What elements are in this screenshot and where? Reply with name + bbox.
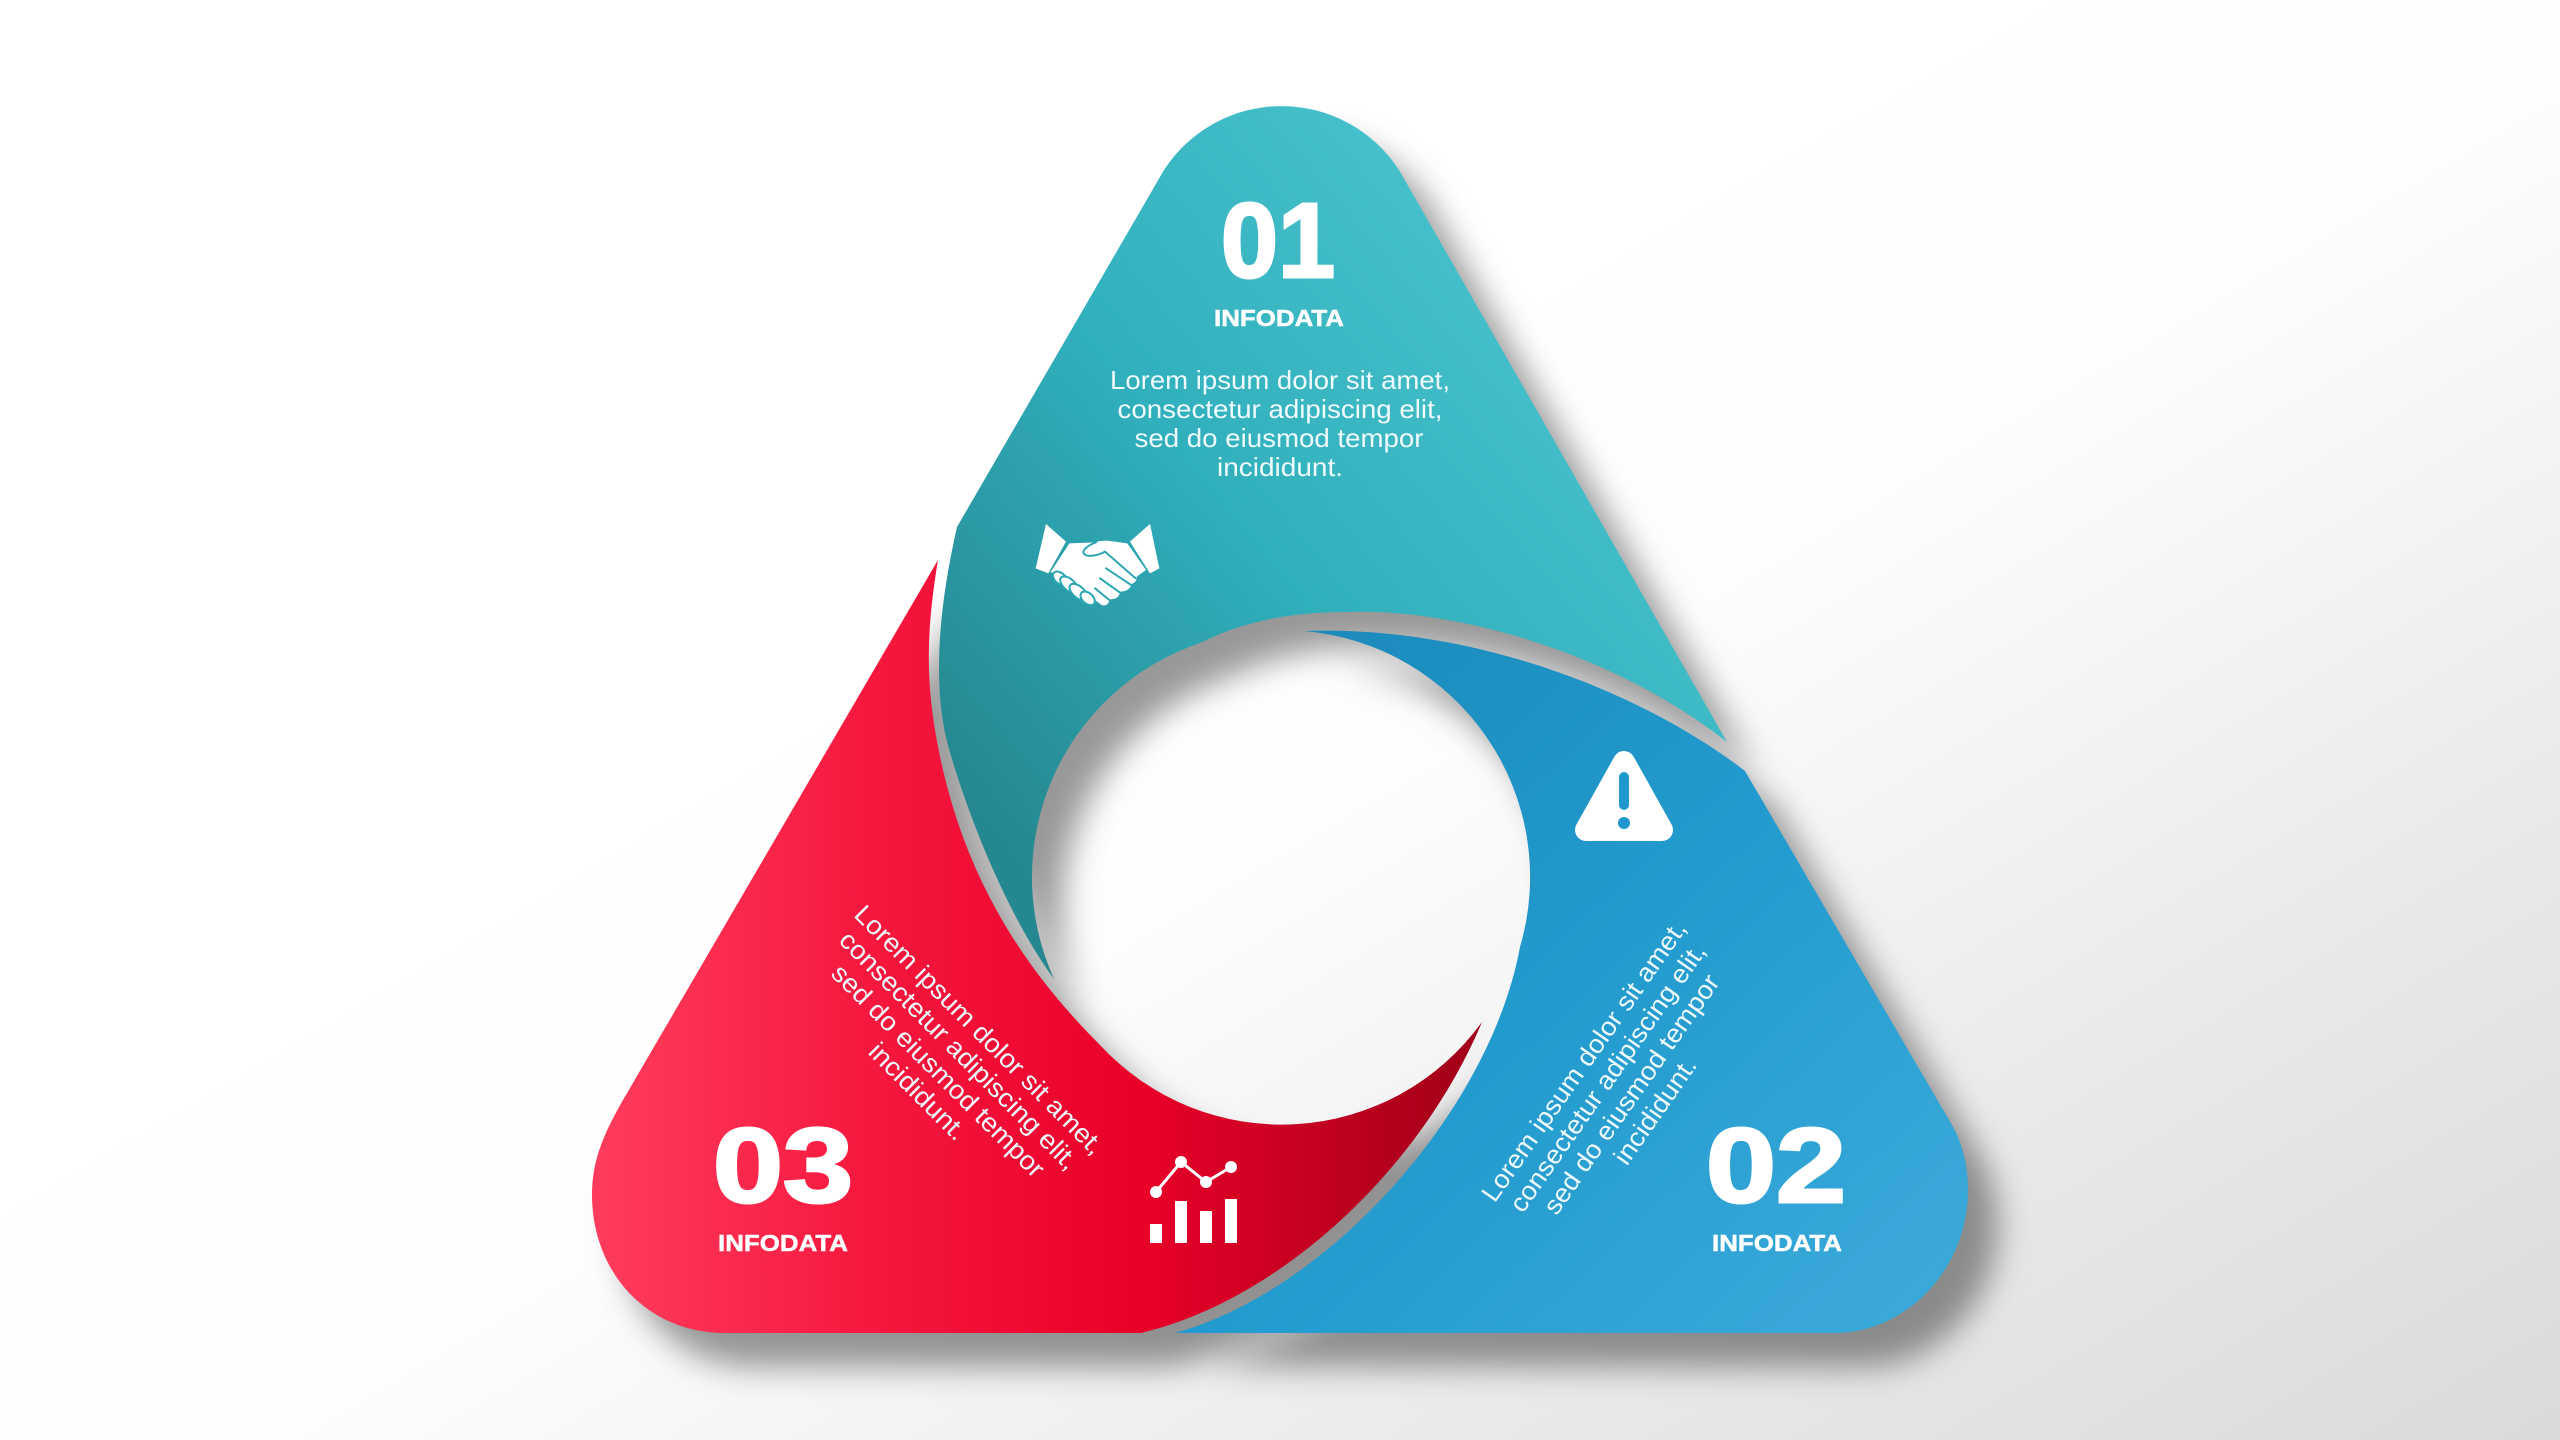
text block 03 bbox=[787, 899, 1110, 1222]
label infodata 01: INFODATA bbox=[1214, 305, 1344, 331]
number 03: 03 bbox=[713, 1107, 853, 1225]
text block 01: Lorem ipsum dolor sit amet, bbox=[1110, 365, 1450, 395]
number 01: 01 bbox=[1221, 182, 1335, 300]
text block 03: consectetur adipiscing elit, bbox=[833, 925, 1084, 1176]
icon: warning triangle bbox=[1586, 762, 1662, 830]
text block 03: incididunt. bbox=[863, 1036, 973, 1146]
label infodata 02: INFODATA bbox=[1712, 1230, 1842, 1256]
panel: segment 03 red bbox=[592, 560, 1482, 1333]
icon: chart with trend line bbox=[1150, 1156, 1237, 1243]
drop shadows of segments bbox=[622, 140, 1998, 1367]
panel: segment 02 blue bbox=[1175, 631, 1968, 1333]
text block 01 bbox=[1110, 365, 1450, 482]
label infodata 03: INFODATA bbox=[718, 1230, 848, 1256]
text block 03: Lorem ipsum dolor sit amet, bbox=[849, 899, 1110, 1160]
text block 02: incididunt. bbox=[1607, 1051, 1703, 1170]
text block 02: sed do eiusmod tempor bbox=[1537, 968, 1726, 1220]
text block 01: incididunt. bbox=[1217, 452, 1343, 482]
text block 01: sed do eiusmod tempor bbox=[1134, 423, 1424, 453]
icon: handshake bbox=[1036, 524, 1159, 608]
panel: segment 01 teal bbox=[939, 106, 1727, 979]
text block 02: Lorem ipsum dolor sit amet, bbox=[1475, 915, 1692, 1207]
text block 02: consectetur adipiscing elit, bbox=[1503, 937, 1712, 1218]
number 02: 02 bbox=[1706, 1107, 1846, 1225]
text block 02 bbox=[1475, 915, 1764, 1257]
text block 03: sed do eiusmod tempor bbox=[826, 958, 1051, 1184]
text block 01: consectetur adipiscing elit, bbox=[1118, 394, 1442, 424]
